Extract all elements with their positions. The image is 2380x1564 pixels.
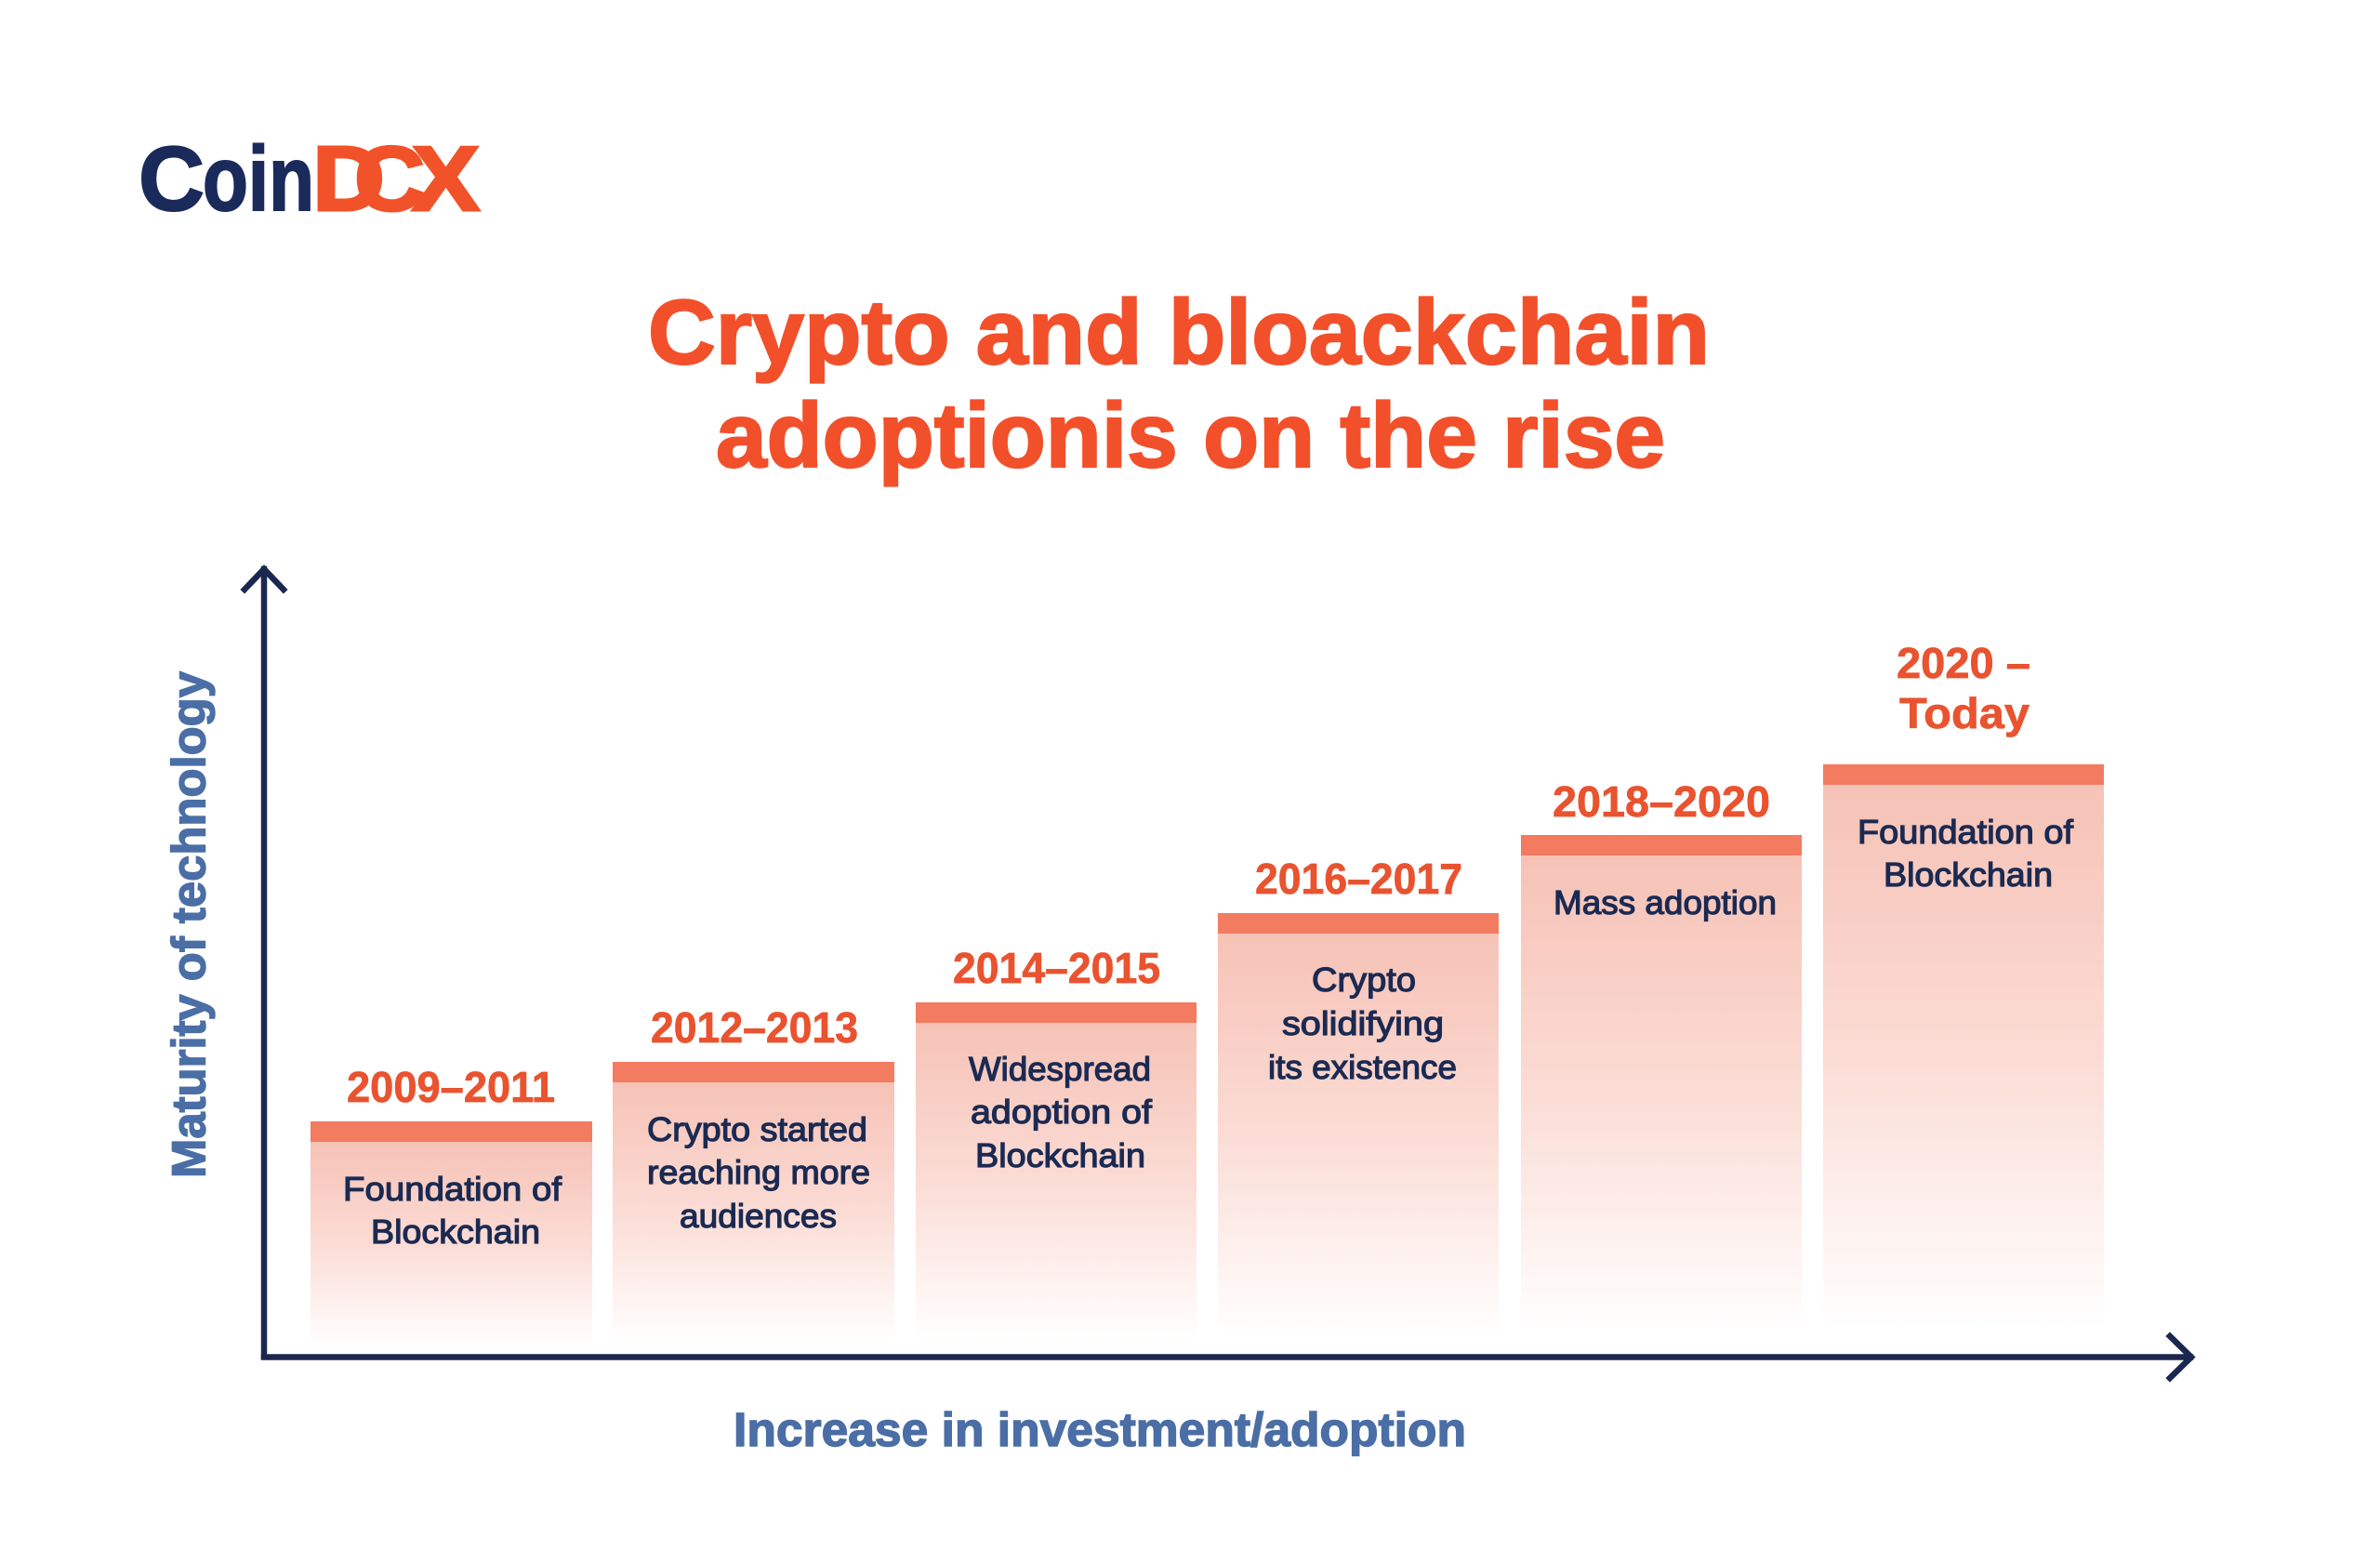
- description: Crypto started reaching more audiences: [647, 1110, 870, 1235]
- logo: CoinDCX: X: [412, 127, 480, 230]
- year label: 2020 - Today: Today: [1899, 689, 2030, 737]
- description: Crypto solidifying its existence: solidifying: [1282, 1004, 1444, 1042]
- year label: 2020 - Today: [1897, 639, 2030, 737]
- arrow: y axis: [245, 569, 284, 1357]
- description: Widespread adoption of Blockchain: Widespread: [969, 1050, 1151, 1088]
- description: Crypto started reaching more audiences: audiences: [680, 1197, 837, 1235]
- description: Mass adoption: Mass adoption: [1554, 883, 1777, 921]
- bar: 2012-2013: [613, 1062, 894, 1344]
- logo: CoinDCX: D: [312, 127, 385, 230]
- arrow: x axis: [264, 1336, 2191, 1378]
- bar: 2020-Today: [1823, 764, 2104, 1329]
- x-axis label: Increase in investment/adoption: [734, 1403, 1466, 1456]
- bar: 2014-2015: [916, 1002, 1197, 1340]
- description: Foundation of Blockchain: [1858, 813, 2074, 894]
- panel: 2018-2020: [1521, 777, 1802, 1332]
- description: Foundation of Blockchain: Foundation of: [1858, 813, 2074, 851]
- year label: 2020 - Today: 2020 –: [1897, 639, 2030, 687]
- y-axis label: Maturity of technology: [163, 670, 216, 1178]
- bar: 2009-2011: [311, 1121, 592, 1347]
- bar: 2018-2020: [1521, 835, 1802, 1332]
- logo: CoinDCX: C: [354, 127, 425, 230]
- year label: 2014-2015: 2014–2015: [953, 944, 1160, 992]
- title: Crypto and bloackchain: [648, 281, 1710, 383]
- panel: 2016-2017: [1218, 855, 1499, 1336]
- description: Widespread adoption of Blockchain: adoption of: [971, 1093, 1153, 1131]
- title: adoptionis on the rise: [716, 384, 1665, 486]
- panel: 2020-Today: [1823, 639, 2104, 1329]
- logo: CoinDCX: C: [139, 127, 205, 230]
- panel: 2012-2013: [613, 1003, 894, 1344]
- logo: CoinDCX: oin: [203, 127, 314, 230]
- description: Widespread adoption of Blockchain: Blockchain: [975, 1136, 1145, 1174]
- logo: CoinDCX: [139, 127, 480, 230]
- description: Crypto started reaching more audiences: reaching more: [647, 1153, 870, 1191]
- description: Crypto solidifying its existence: [1268, 961, 1457, 1086]
- description: Foundation of Blockchain: [343, 1170, 562, 1251]
- description: Foundation of Blockchain: Foundation of: [343, 1170, 562, 1208]
- description: Crypto started reaching more audiences: Crypto started: [647, 1110, 867, 1148]
- year label: 2009-2011: 2009–2011: [347, 1063, 555, 1111]
- year label: 2012-2013: 2012–2013: [651, 1003, 858, 1052]
- panel: 2009-2011: [311, 1063, 592, 1347]
- description: Crypto solidifying its existence: Crypto: [1312, 961, 1416, 999]
- description: Crypto solidifying its existence: its existence: [1268, 1048, 1457, 1086]
- title: [648, 281, 1710, 486]
- year label: 2016-2017: 2016–2017: [1255, 855, 1462, 903]
- bar: 2016-2017: [1218, 913, 1499, 1336]
- description: Foundation of Blockchain: Blockchain: [1884, 855, 2053, 894]
- description: Foundation of Blockchain: Blockchain: [371, 1213, 540, 1251]
- panel: 2014-2015: [916, 944, 1197, 1340]
- year label: 2018-2020: 2018–2020: [1553, 777, 1770, 826]
- description: Widespread adoption of Blockchain: [969, 1050, 1153, 1174]
